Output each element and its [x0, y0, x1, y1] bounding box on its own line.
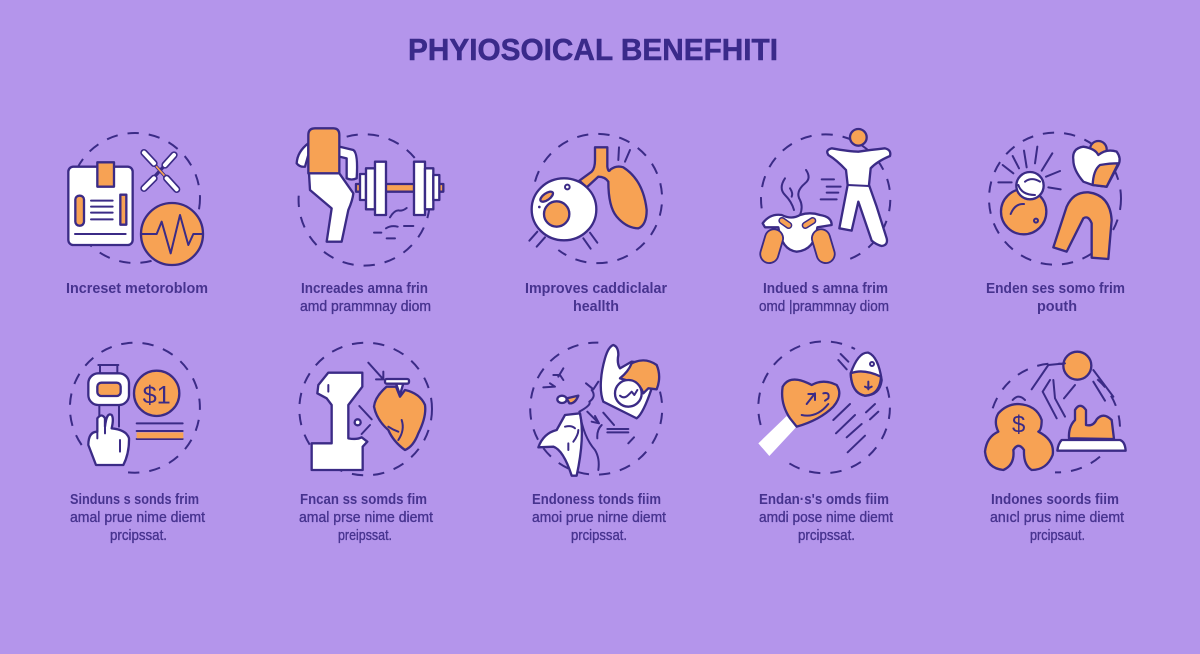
caption — [300, 281, 431, 315]
icon: glove and capsule — [758, 341, 890, 473]
caption: preipssat. — [338, 528, 392, 544]
caption: prcipssat. — [110, 528, 167, 544]
icon: cell and lung — [529, 134, 662, 263]
icon: orbs, leg and flower — [989, 133, 1121, 265]
panel: boxing glove — [758, 341, 893, 544]
icon: figure and game controller — [761, 129, 890, 262]
caption: Fncan ss somds fim — [300, 492, 427, 508]
caption — [759, 281, 889, 315]
caption: Indued s amna frim — [763, 281, 888, 297]
icon: watch, hand and coin: $1 — [143, 381, 171, 409]
caption: pouth — [1037, 299, 1077, 315]
caption: Improves caddiclalar — [525, 281, 667, 297]
panel: joints — [986, 133, 1125, 315]
panel: heart machine — [299, 343, 433, 544]
caption: anıcl prus nime diemt — [990, 510, 1124, 526]
icon: hand holding organ — [530, 343, 662, 476]
icon: figure, money bag and base — [985, 352, 1126, 472]
panel: game controller — [759, 129, 890, 315]
caption: amoi prue nirne diemt — [532, 510, 666, 526]
caption: Enden ses somo frim — [986, 281, 1125, 297]
caption: Increset metoroblom — [66, 281, 208, 297]
caption: prcipssat. — [571, 528, 627, 544]
panel: cardiovascular — [525, 134, 667, 315]
caption — [532, 492, 666, 544]
caption — [986, 281, 1125, 315]
caption — [759, 492, 893, 544]
icon: runner and dumbbell — [297, 128, 443, 266]
caption: amdi pose nime diemt — [759, 510, 893, 526]
caption: Endoness tonds fiim — [532, 492, 661, 508]
caption: omd |prammnay diom — [759, 299, 889, 315]
caption: Indones soords fiim — [991, 492, 1119, 508]
caption: Endan·s's omds fiim — [759, 492, 889, 508]
caption: amal prse nime diemt — [299, 510, 433, 526]
caption — [525, 281, 667, 315]
panel: money bag — [985, 352, 1126, 544]
icon: clipboard, swabs and heartbeat — [68, 133, 203, 265]
caption: prcipssat. — [798, 528, 855, 544]
caption — [70, 492, 205, 544]
caption: Increades amna frin — [301, 281, 428, 297]
panel: metabolism — [66, 133, 208, 297]
caption: prcipsaut. — [1030, 528, 1085, 544]
title: PHYIOSOICAL BENEFHITI — [408, 32, 778, 67]
caption — [990, 492, 1124, 544]
panel: wearable payment — [70, 343, 205, 544]
caption: Sinduns s sonds frim — [70, 492, 199, 508]
caption: amal prue nime diemt — [70, 510, 205, 526]
icon: watch, hand and coin — [70, 343, 200, 473]
caption: amd prammnay diom — [300, 299, 431, 315]
panel: dumbbell — [297, 128, 443, 315]
caption: heallth — [573, 299, 619, 315]
panel: hand and figure — [530, 343, 666, 544]
icon: figure, money bag and base: $ — [1012, 411, 1025, 438]
caption — [299, 492, 433, 544]
icon: machine and heart — [299, 343, 432, 475]
